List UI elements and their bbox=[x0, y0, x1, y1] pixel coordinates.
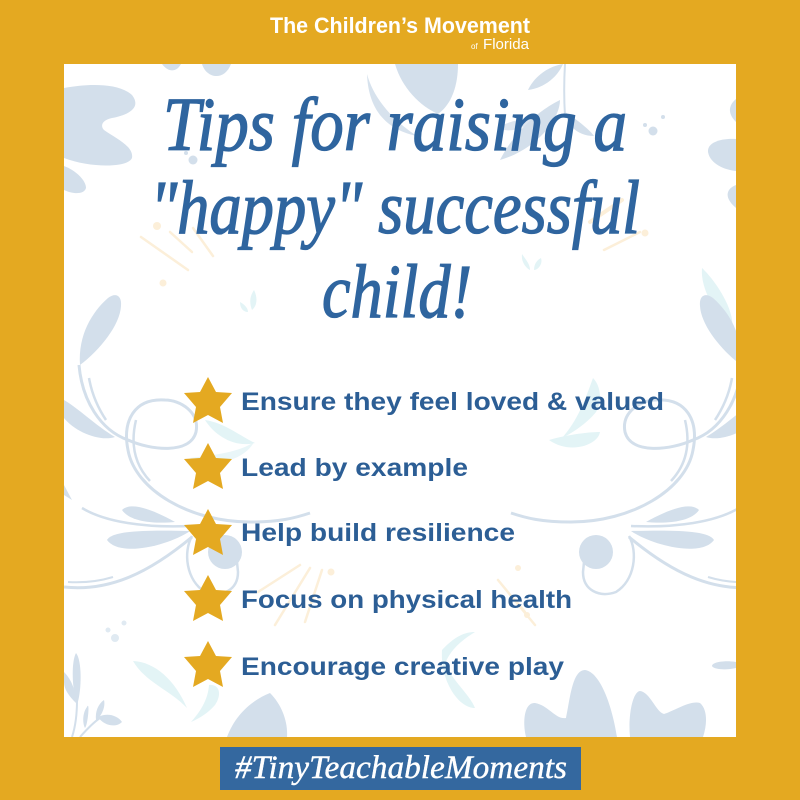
top-centre leaves and branch bbox=[367, 64, 594, 160]
tip 3: Help build resilience bbox=[241, 519, 515, 547]
bottom-left dots bbox=[106, 620, 126, 642]
tip list bbox=[184, 377, 664, 687]
right ornament (mirror) bbox=[511, 295, 757, 594]
tip 3 bbox=[184, 509, 515, 555]
floral background decoration bbox=[64, 64, 757, 737]
title bbox=[150, 83, 640, 334]
hashtag banner: #TinyTeachableMoments bbox=[235, 750, 567, 786]
tip 5: Encourage creative play bbox=[241, 653, 564, 681]
bottom-right blobs bbox=[524, 661, 736, 737]
bottom-left plant bbox=[64, 653, 122, 728]
top-left blobs bbox=[64, 64, 231, 193]
tip 2 bbox=[184, 443, 468, 489]
dots top right and left bbox=[184, 115, 665, 164]
panel: white card bbox=[64, 64, 736, 737]
left ornament bbox=[64, 295, 310, 594]
title: child! bbox=[322, 250, 472, 334]
logo: The Children's Movement of Florida: Florida bbox=[483, 36, 530, 53]
tip 4 bbox=[184, 575, 572, 621]
bottom-centre leaf bbox=[227, 693, 287, 737]
logo: The Children's Movement of Florida: of bbox=[471, 42, 478, 51]
right-side blobs bbox=[708, 99, 736, 208]
tip 4: Focus on physical health bbox=[241, 586, 572, 614]
logo: The Children's Movement of Florida bbox=[270, 13, 531, 53]
title: "happy" successful bbox=[150, 166, 640, 250]
teal leaves and drops bbox=[133, 254, 732, 722]
tip 2: Lead by example bbox=[241, 454, 468, 482]
logo: The Children's Movement of Florida: The Children’s Movement bbox=[270, 13, 531, 38]
tip 5 bbox=[184, 641, 564, 687]
tip 1: Ensure they feel loved & valued bbox=[241, 388, 664, 416]
cream sparks bbox=[141, 200, 640, 625]
title: Tips for raising a bbox=[163, 83, 627, 167]
tip 1 bbox=[184, 377, 664, 423]
